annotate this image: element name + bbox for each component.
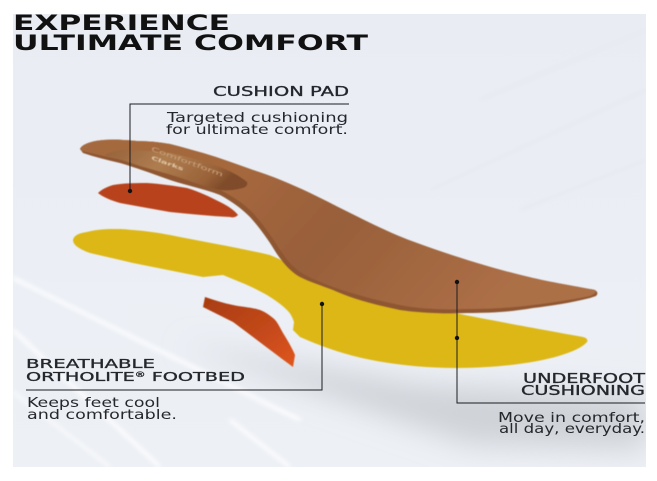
orange arch piece [203,297,295,367]
logo text on heel pad: Comfortform [150,146,224,179]
brown insole [80,140,597,313]
title [13,11,369,55]
callout: underfoot cushioning [455,280,645,437]
callout: breathable ortholite footbed [26,302,324,423]
logo text on heel pad: Clarks [150,155,184,173]
title: ULTIMATE COMFORT [13,31,369,55]
callout: cushion pad [128,84,349,193]
logo text on heel pad [147,146,224,186]
callout: breathable ortholite footbed: Keeps feet cool [27,395,160,411]
yellow footbed layer [73,229,587,368]
callout: cushion pad: Targeted cushioning [166,110,348,126]
raised heel pad [105,150,247,190]
callout: breathable ortholite footbed: BREATHABLE [26,356,155,371]
callout: breathable ortholite footbed: FOOTBED [146,369,245,384]
callout: underfoot cushioning: all day, everyday. [499,421,645,437]
insole edge [80,140,597,313]
callout: underfoot cushioning: CUSHIONING [521,384,645,399]
callout: underfoot cushioning: UNDERFOOT [523,372,645,387]
callout: breathable ortholite footbed: ® [135,371,146,379]
red cushion pad [98,183,238,217]
callout: cushion pad: CUSHION PAD [213,84,349,100]
callout: breathable ortholite footbed: and comfortable. [27,407,177,423]
insole top surface [80,140,596,309]
callout: underfoot cushioning: Move in comfort, [498,410,645,426]
callout: breathable ortholite footbed: ORTHOLITE [26,369,97,384]
title: EXPERIENCE [13,11,230,35]
callout: cushion pad: for ultimate comfort. [166,122,348,138]
